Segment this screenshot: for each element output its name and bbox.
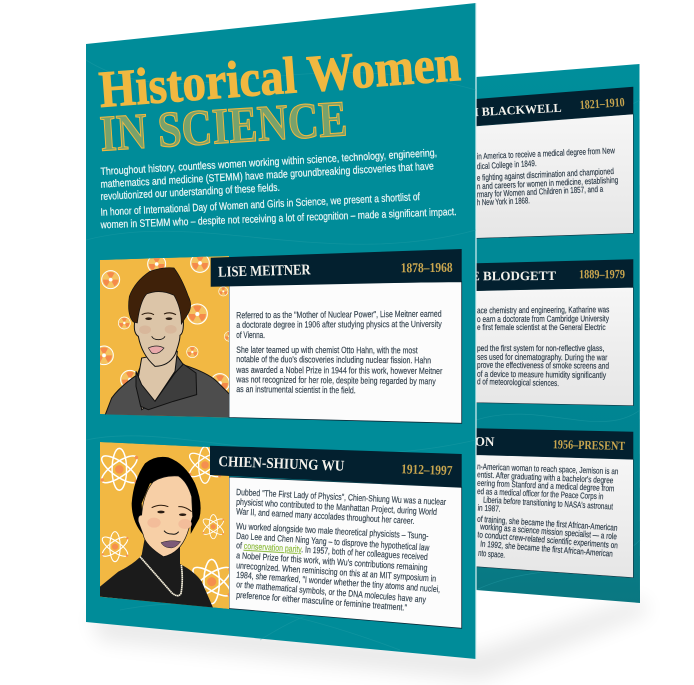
body text: Referred to as the "Mother of Nuclear Power", Lise Meitner earned [236,309,442,320]
body text [236,309,442,395]
title line: In Science: IN SCIENCE [98,91,349,163]
card: Chien-Shiung Wu [98,442,462,628]
card: Elizabeth Blackwell: in America to receive a medical degree from New [477,145,616,161]
card: Mae Jemison: nto space. [478,548,506,560]
body text: notable of the duo's discoveries including nuclear fission. Hahn [236,354,431,365]
card: Mae Jemison: Liberia before transitioning to NASA's astronaut [483,495,614,512]
card: Elizabeth Blackwell: ELIZABETH BLACKWELL [407,101,562,123]
card: Katharine Blodgett: o earn a doctorate from Cambridge University [477,313,610,324]
card: Mae Jemison: eering from Stanford and a medical degree from [477,478,615,493]
intro text: revolutionized our understanding of these fields. [100,182,280,203]
card: Mae Jemison: In 1992, she became the first African-American [480,539,613,559]
body text: or the mathematical symbols, or the DNA molecules have any [236,579,427,605]
card: Katharine Blodgett: of a device to measure humidity significantly [477,369,607,380]
body text: Wu worked alongside two male theoretical physicists – Tsung- [236,521,429,541]
portrait: Chien-Shiung Wu [98,442,234,609]
card: Mae Jemison: n-American woman to reach space, Jemison is an [477,461,619,476]
name: CHIEN-SHIUNG WU [218,454,345,475]
card: Mae Jemison: 1956–PRESENT [553,437,626,453]
card: Elizabeth Blackwell: e fighting against discrimination and championed [477,166,614,183]
body text: physicist who contributed to the Manhattan Project, during World [236,497,437,517]
body text: War II, and earned many accolades throughout her career. [236,506,415,526]
card: Katharine Blodgett: ses used for cinematography. During the war [477,352,607,362]
card: Katharine Blodgett: e first female scientist at the General Electric [477,322,606,332]
card: Mae Jemison: MAE JEMISON [401,431,495,449]
card: Katharine Blodgett: ped the first system for non-reflective glass, [477,343,604,353]
body text: a Nobel Prize for this work, with Wu's contributions remaining [236,550,428,573]
header bar [211,249,462,287]
body text: preference for either masculine or feminine treatment." [236,590,407,613]
body text: She later teamed up with chemist Otto Hahn, with the most [236,345,418,355]
card: Mae Jemison: of training, she became the first African-American [477,514,618,533]
card: Mae Jemison: entist. After graduating with a bachelor's degree [477,469,614,485]
body text: Dubbed "The First Lady of Physics", Chien-Shiung Wu was a nuclear [236,487,446,507]
title line: Historical Women: Historical Women [97,35,462,119]
card: Katharine Blodgett: KATHARINE BLODGETT [401,268,556,284]
card: Mae Jemison: working as a science mission specialist — a role [479,521,617,541]
card: Elizabeth Blackwell: 1821–1910 [579,95,625,112]
card: Mae Jemison: in 1987. [477,503,501,514]
body text: a doctorate degree in 1906 after studying physics at the University [236,319,442,330]
card: Mae Jemison: ed as a medical officer for the Peace Corps in [477,486,604,501]
card: Katharine Blodgett: ace chemistry and engineering, Katharine was [477,304,609,315]
card: Katharine Blodgett: d of meteorological sciences. [477,376,559,388]
card: Elizabeth Blackwell: rmary for Women and Children in 1857, and a [477,184,604,199]
intro text: In honor of International Day of Women and Girls in Science, we present a shortlist of [100,191,420,219]
intro text [100,147,457,231]
card: Katharine Blodgett: 1889–1979 [579,267,625,281]
body text: was awarded a Nobel Prize in 1944 for this work, however Meitner [236,365,442,376]
body text: of conservation parity. In 1957, both of her colleagues received [236,540,428,562]
card: Katharine Blodgett: prove the effectiveness of smoke screens and [477,360,609,371]
panel: front page [86,3,476,659]
years: 1912–1997 [401,461,453,478]
card: Elizabeth Blackwell: n and careers for women in medicine, establishing [477,175,619,191]
intro text: women in STEMM who – despite not receiving a lot of recognition – made a significant impact. [100,206,457,231]
body text [236,487,446,613]
card: Mae Jemison [401,428,633,578]
card: Mae Jemison: to conduct crew-related scientific experiments on [477,529,618,550]
ground shadow [90,598,650,680]
portrait: Lise Meitner [95,254,234,418]
body text: was not recognized for her role, despite being regarded by many [236,374,436,386]
body text: 1984, she remarked, "I wonder whether the tiny atoms and nuclei, [236,570,441,594]
body text: unrecognized. When reminiscing on this at an MIT symposium in [236,560,436,584]
body text: Dao Lee and Chen Ning Yang – to disprove the hypothetical law [236,531,430,553]
years: 1878–1968 [401,260,453,275]
intro text: mathematics and medicine (STEMM) have made groundbreaking discoveries that have [100,160,434,191]
intro text: Throughout history, countless women working within science, technology, engineering, [100,147,437,178]
body text: of Vienna. [236,330,265,340]
name: LISE MEITNER [218,262,311,281]
card: Elizabeth Blackwell: dical College in 1849. [477,158,537,171]
card: Katharine Blodgett [401,259,633,406]
panel: back page [401,64,640,603]
card: Elizabeth Blackwell [407,87,633,238]
header bar [210,446,462,487]
card: Lise Meitner [95,249,462,423]
card: Elizabeth Blackwell: h New York in 1868. [477,195,530,207]
text panel [229,282,462,423]
text panel [229,477,462,628]
title [97,35,462,163]
body text: as an instrumental scientist in the field. [236,384,356,395]
